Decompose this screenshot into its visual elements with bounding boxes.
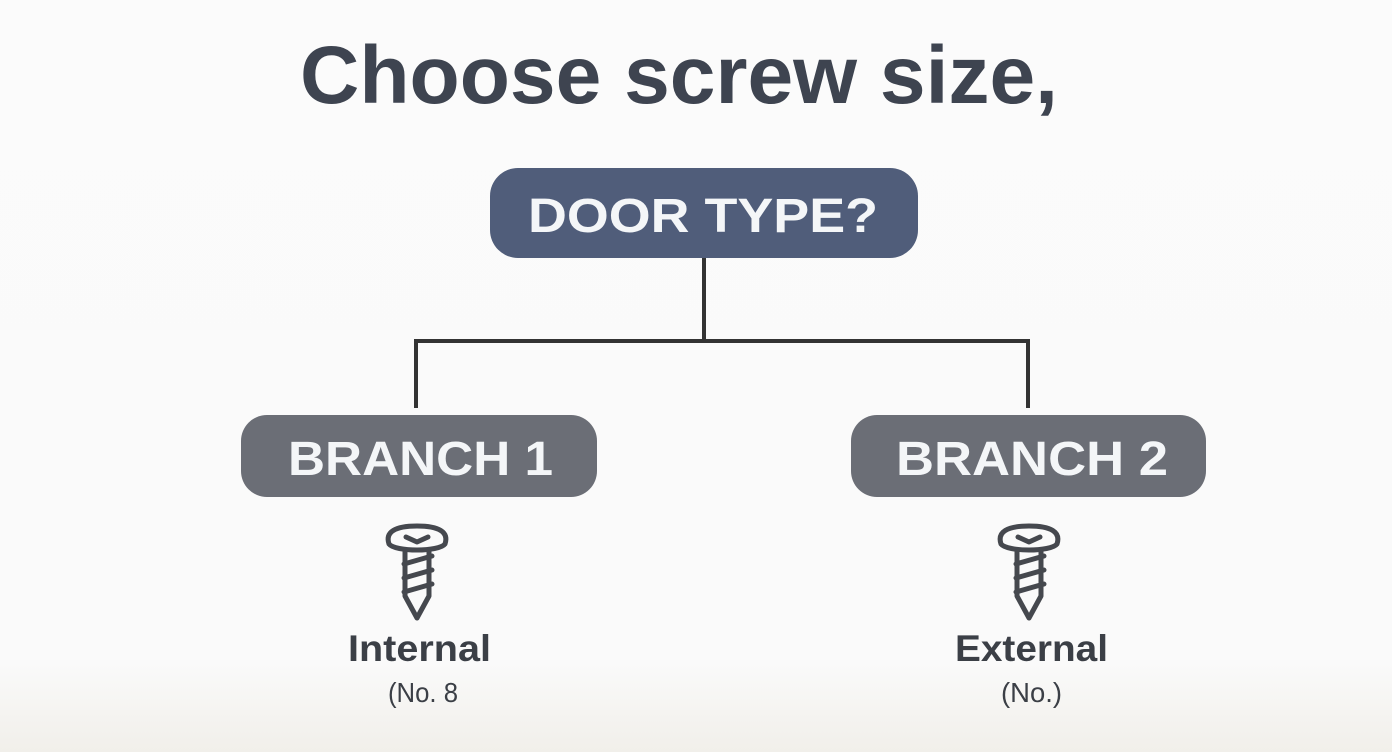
label: external: (No.) bbox=[1001, 677, 1062, 708]
icon: screw internal bbox=[388, 526, 446, 618]
title: Choose screw size, bbox=[300, 30, 1058, 121]
box: branch 1 bbox=[241, 415, 597, 497]
label: internal bbox=[348, 628, 491, 708]
box: branch 2 bbox=[851, 415, 1206, 497]
box: door type: DOOR TYPE? bbox=[528, 190, 878, 243]
icon: screw external bbox=[1000, 526, 1058, 618]
label: external bbox=[955, 628, 1108, 708]
label: internal: Internal bbox=[348, 628, 491, 669]
box: branch 1: BRANCH 1 bbox=[288, 433, 553, 486]
label: internal: (No. 8 bbox=[388, 677, 458, 708]
connector lines bbox=[415, 258, 1030, 408]
box: branch 2: BRANCH 2 bbox=[896, 433, 1168, 486]
box: door type bbox=[490, 168, 918, 258]
label: external: External bbox=[955, 628, 1108, 669]
